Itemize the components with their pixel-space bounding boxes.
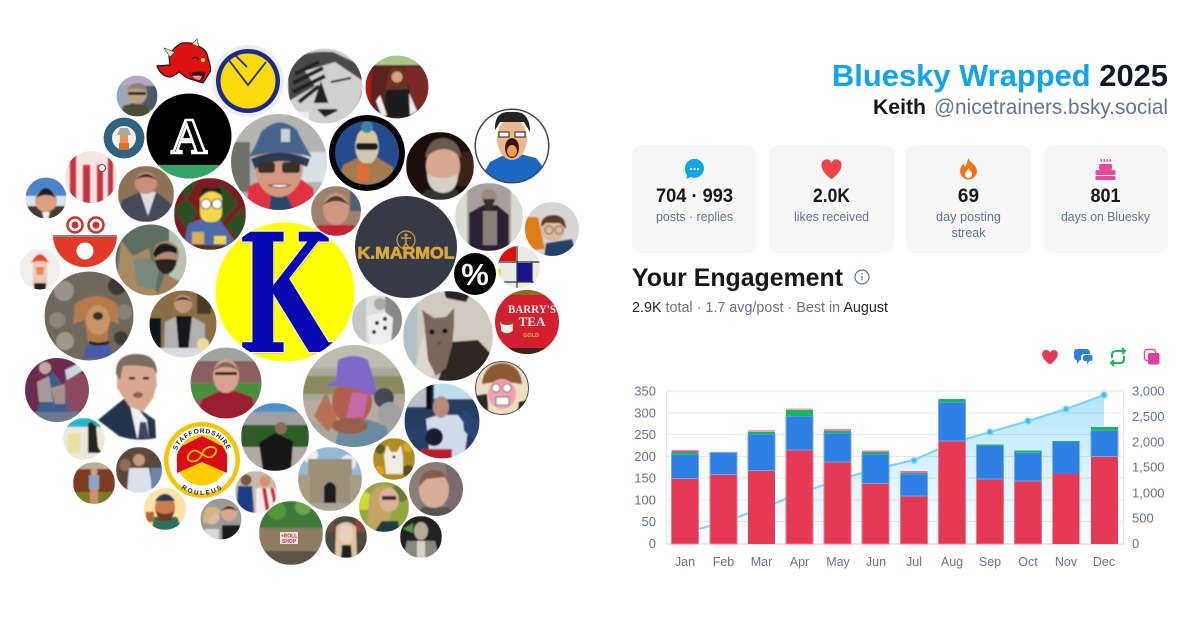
- avatar: percent sign: [454, 253, 496, 295]
- month labels: Jul: [906, 555, 922, 569]
- avatar: sole council football pundits badge: [104, 118, 144, 158]
- bar: Aug: [938, 399, 966, 544]
- month labels: Aug: [941, 555, 963, 569]
- left axis labels: 50: [642, 514, 656, 529]
- avatar: older bearded man: [406, 132, 474, 200]
- combined bar and line chart: [634, 384, 1165, 569]
- right axis labels: 3,000: [1132, 384, 1165, 398]
- right axis labels: 0: [1132, 536, 1139, 551]
- avatar: A logo: [145, 92, 233, 181]
- avatar: cartoon soldier in helmet: [475, 361, 529, 415]
- avatar: roll shop wall: +ROLL: [281, 534, 297, 540]
- bar: Oct: [1014, 450, 1042, 544]
- bar: Nov: [1052, 441, 1080, 544]
- left axis labels: 200: [634, 449, 656, 464]
- avatar: man with glasses at stadium: [190, 347, 262, 419]
- avatar: man in beanie with beer: [329, 115, 405, 191]
- avatar: K.MARMOL logo: K.MARMOL: [357, 244, 455, 262]
- value: 2.0K: [813, 186, 850, 207]
- bar: Feb: [710, 452, 737, 544]
- avatar: bishop in black and white: [400, 516, 442, 558]
- avatar: man in bucket hat: [230, 113, 329, 211]
- avatar: small man in hat: [25, 177, 67, 219]
- bar: Dec: [1091, 427, 1118, 544]
- avatar: beaker muppet: [19, 248, 61, 291]
- avatar: A logo: A: [171, 108, 207, 164]
- engagement summary: 2.9K total · 1.7 avg/post · Best in August: [632, 300, 888, 316]
- avatar: black and white face: [288, 48, 362, 124]
- avatar: surprised man in suit cutout: [98, 354, 157, 440]
- avatar: blue K logo: K: [237, 197, 337, 391]
- avatar: group with white shirt: [116, 447, 163, 493]
- bar: Jul: [900, 471, 928, 544]
- label: day posting: [936, 209, 1001, 224]
- month labels: [675, 555, 1115, 569]
- avatar: blue K logo: [216, 222, 354, 362]
- handle: @nicetrainers.bsky.social: [934, 96, 1168, 119]
- icon: likes: [1042, 350, 1058, 364]
- stat card: days on Bluesky: [1043, 145, 1168, 253]
- avatar: red devil: [157, 39, 211, 83]
- avatar: man in grey suit: [118, 166, 174, 222]
- section heading: Your Engagement: [632, 264, 844, 292]
- chart legend: [1042, 348, 1160, 366]
- icon: chat bubble: [685, 159, 704, 179]
- avatar: woman with glasses: [355, 482, 409, 532]
- avatar: Staffordshire Rouleurs badge: [164, 422, 240, 498]
- right axis labels: 1,500: [1132, 460, 1165, 474]
- avatar: Barry's Tea pack: TEA: [519, 314, 546, 329]
- avatar: dog: [44, 271, 134, 361]
- avatar: Barry's Tea pack: [495, 290, 559, 354]
- right axis labels: 2,000: [1132, 434, 1165, 450]
- avatar: purple-tinted street person: [24, 357, 90, 424]
- avatar: Staffordshire Rouleurs badge: STAFFORDSHIRE: [173, 428, 231, 450]
- month labels: Mar: [751, 555, 772, 569]
- month labels: Jan: [675, 555, 695, 569]
- stat card: streak: streak: [952, 225, 986, 240]
- stacked bars: [672, 399, 1118, 544]
- icon: replies: [1074, 349, 1092, 364]
- label: likes received: [794, 209, 869, 224]
- bar: Apr: [786, 408, 813, 544]
- left axis labels: [634, 384, 656, 551]
- value: 704 · 993: [656, 186, 733, 207]
- right axis labels: 1,000: [1132, 486, 1165, 500]
- right axis labels: [1132, 384, 1165, 551]
- avatar: K.MARMOL logo: [355, 196, 457, 298]
- avatar: percent sign: %: [461, 257, 489, 292]
- month labels: Apr: [790, 555, 809, 569]
- avatar: tabby cat: [403, 291, 493, 381]
- icon: quotes: [1144, 350, 1160, 364]
- bar: Mar: [748, 430, 775, 544]
- left axis labels: 250: [634, 427, 656, 442]
- avatar: man in patterned jumper: [352, 295, 403, 345]
- value: 801: [1090, 186, 1121, 207]
- bar: Jun: [862, 450, 889, 544]
- avatar: Barry's Tea pack: BARRY'S: [508, 302, 556, 316]
- month labels: Oct: [1018, 555, 1038, 569]
- bar: May: [824, 429, 851, 544]
- cumulative line: [685, 395, 1104, 533]
- icon: heart: [821, 159, 842, 179]
- month labels: May: [826, 555, 851, 569]
- stat card: likes: [769, 145, 894, 253]
- avatar: man with red shirt: [311, 186, 362, 236]
- avatar: man in purple bucket hat: [302, 344, 406, 448]
- left axis labels: 150: [634, 470, 656, 486]
- avatar: pixel art bearded man: [144, 488, 186, 530]
- cumulative area: [685, 395, 1104, 544]
- month labels: Dec: [1093, 555, 1115, 569]
- icon: cake: [1096, 159, 1116, 180]
- month labels: Sep: [979, 555, 1001, 569]
- avatar: crowd man in white polo: [404, 383, 480, 459]
- avatar: striped shirt: [64, 150, 118, 205]
- avatar: black and white photo of man: [455, 183, 523, 251]
- stat card: posts and replies: [632, 145, 757, 253]
- line points: [911, 392, 1107, 463]
- title: Bluesky Wrapped 2025: [832, 58, 1168, 93]
- avatar: woman in crowd: [365, 55, 429, 119]
- avatar: couple: [200, 498, 242, 540]
- avatar: man with glasses: [116, 75, 158, 117]
- value: 69: [958, 186, 979, 207]
- month labels: Feb: [713, 555, 734, 569]
- avatar: Simpsons character: [174, 178, 246, 250]
- avatar: boy in football kit: [73, 462, 115, 504]
- header: [832, 58, 1168, 119]
- avatar cluster: [20, 38, 579, 565]
- avatar: Staffordshire Rouleurs badge: ROULEUS: [182, 484, 222, 495]
- icon: info: [855, 270, 869, 284]
- left axis labels: 100: [634, 492, 656, 508]
- stat card: streak: [906, 145, 1031, 253]
- display name: Keith: [873, 96, 926, 119]
- avatar: Barry's Tea pack: GOLD: [523, 333, 539, 339]
- month labels: Jun: [866, 555, 886, 569]
- left axis labels: 350: [634, 384, 656, 398]
- avatar: Mondrian: [498, 246, 540, 288]
- icon: reposts: [1111, 348, 1125, 366]
- right axis labels: 2,500: [1132, 409, 1165, 424]
- label: posts · replies: [656, 209, 733, 224]
- bar: Jan: [672, 450, 698, 544]
- icon: flame: [960, 158, 977, 180]
- month labels: Nov: [1055, 555, 1078, 569]
- bar: Sep: [976, 444, 1004, 544]
- avatar: westie dog on leaves: [373, 438, 415, 480]
- right axis labels: 500: [1132, 510, 1154, 526]
- label: days on Bluesky: [1061, 209, 1150, 224]
- avatar: two footballers: [235, 471, 277, 513]
- left axis labels: 0: [649, 536, 656, 551]
- avatar: Leeds smiley badge: [212, 45, 284, 117]
- avatar: figures on teal background: [63, 418, 105, 460]
- avatar: roll shop wall: SHOP: [282, 539, 297, 545]
- avatar: man at stadium from behind: [241, 403, 309, 471]
- avatar: roll shop wall: [259, 499, 323, 565]
- left axis labels: 300: [634, 406, 656, 420]
- avatar: man in blazer: [149, 290, 217, 358]
- avatar: boy with glasses: [525, 202, 579, 256]
- avatar: shouting manga character: [475, 109, 549, 184]
- avatar: castle gate: [298, 447, 362, 511]
- avatar: blue K logo: K: [238, 199, 338, 393]
- avatar: bearded man with cat: [115, 224, 187, 296]
- avatar: blonde with headset: [325, 516, 367, 558]
- avatar: red rosettes badge: [53, 218, 117, 267]
- avatar: child portrait: [408, 461, 464, 517]
